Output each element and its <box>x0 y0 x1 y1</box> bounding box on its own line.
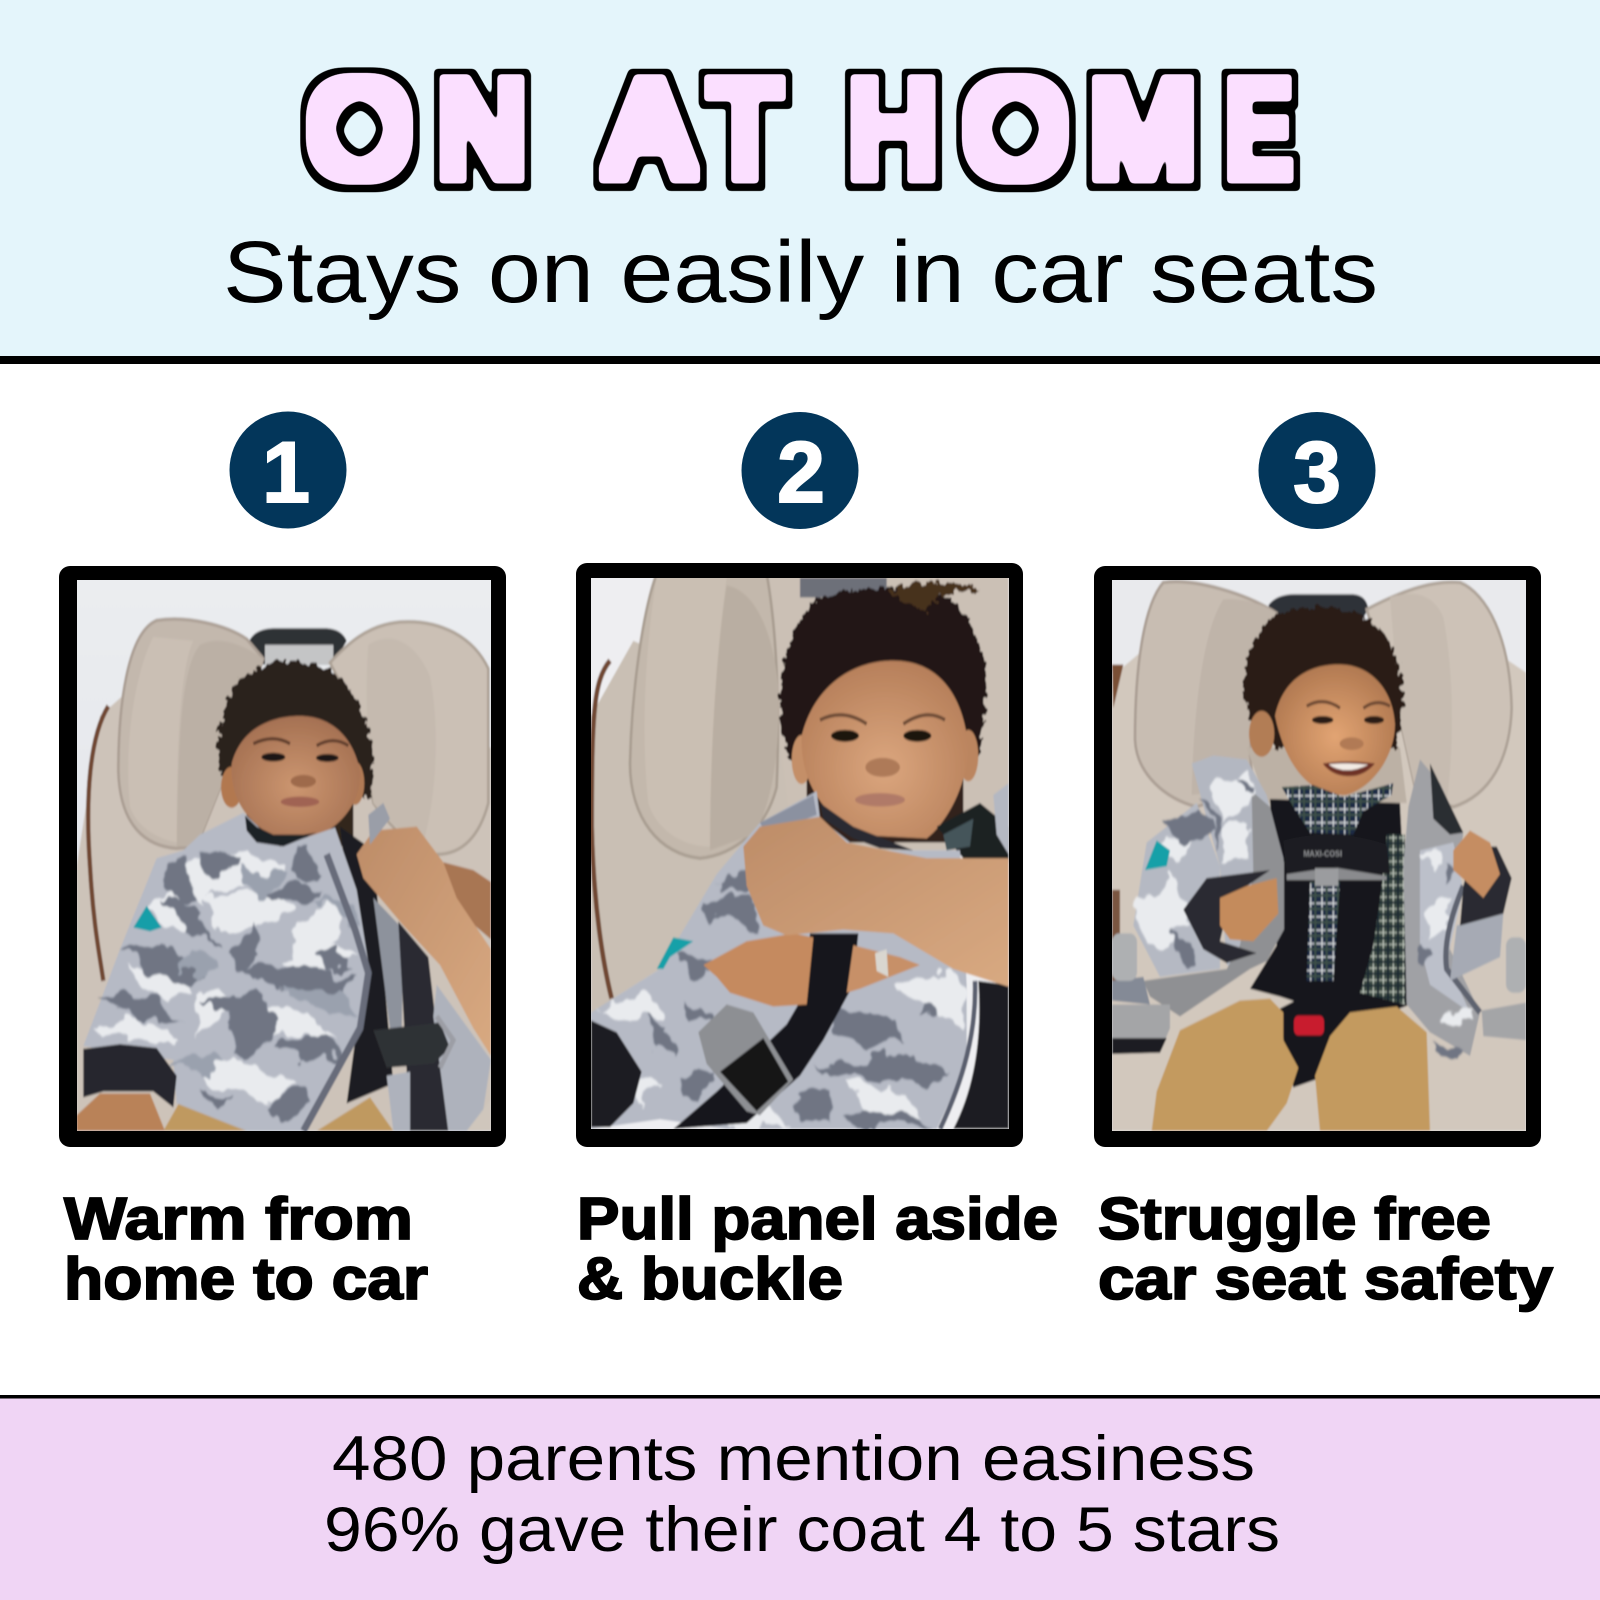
lower hand <box>703 933 813 1007</box>
left fist <box>1220 878 1278 941</box>
subtitle: Stays on easily in car seats <box>223 224 1378 321</box>
face <box>232 716 360 837</box>
panel: photo 2 pulling panel aside to buckle <box>576 563 1023 1147</box>
step badge 3 <box>1258 412 1376 529</box>
camo left <box>1137 767 1250 961</box>
seat body <box>1112 653 1526 1131</box>
straps <box>673 933 858 1129</box>
caption 1: home to car <box>64 1246 428 1312</box>
coat <box>591 791 967 1129</box>
ears <box>221 767 242 808</box>
headrest <box>630 574 778 858</box>
ear <box>1249 711 1274 757</box>
logo <box>657 937 693 969</box>
chest clip <box>698 1005 793 1115</box>
right open panel <box>1403 759 1480 1056</box>
zipper <box>940 981 975 1129</box>
camo patches <box>597 868 967 1129</box>
headrest shadow behind face <box>1247 748 1407 803</box>
step badge 3: 3 <box>1293 425 1341 521</box>
pants <box>164 1103 246 1131</box>
headrest wings <box>118 619 263 848</box>
logo <box>133 906 162 931</box>
clasp <box>1268 594 1368 629</box>
caption 2: & buckle <box>577 1246 843 1312</box>
step badge 1: 1 <box>262 425 310 521</box>
ears <box>792 735 812 784</box>
caption 3: Struggle free <box>1098 1186 1491 1252</box>
seat <box>591 641 793 1016</box>
left open panel <box>1192 756 1283 969</box>
caption 1 <box>64 1186 428 1312</box>
cuff and hand <box>83 1044 177 1107</box>
coat base <box>83 813 369 1131</box>
caption 2 <box>577 1186 1058 1312</box>
title: E <box>1228 55 1289 204</box>
title: O <box>964 55 1067 204</box>
panel: photo 3 smiling child buckled in: MAXI-COSI <box>1303 849 1342 858</box>
title: O <box>308 55 411 204</box>
face <box>1275 664 1395 795</box>
title <box>308 55 1289 204</box>
stat line 2: 96% gave their coat 4 to 5 stars <box>324 1495 1280 1565</box>
camo patches <box>93 844 360 1123</box>
step badge 2: 2 <box>777 425 825 521</box>
neck shadow <box>246 803 354 848</box>
stat line 1: 480 parents mention easiness <box>332 1424 1255 1494</box>
knit collar <box>820 803 913 850</box>
plaid shirt <box>1282 783 1393 835</box>
hair <box>218 660 373 798</box>
bottom left coat <box>1112 977 1150 1005</box>
bracelet <box>875 949 888 977</box>
panel: photo 3 smiling child buckled in <box>1094 566 1541 1147</box>
collar <box>245 816 317 846</box>
hair <box>1243 607 1403 748</box>
side knobs <box>1112 933 1137 981</box>
zipper <box>303 854 368 1131</box>
camo right <box>1420 846 1477 1060</box>
cup holders <box>1112 1005 1170 1054</box>
headrest clasp <box>248 628 347 665</box>
right sleeve and cuff <box>1450 914 1503 981</box>
caption 1: Warm from <box>64 1186 413 1252</box>
panel: footer stats band <box>0 1395 1600 1600</box>
headrests <box>1135 582 1277 807</box>
caption 3: car seat safety <box>1098 1246 1553 1312</box>
step badge 2 <box>742 412 858 529</box>
plaid and strap <box>340 827 393 1103</box>
left sleeve <box>1133 803 1220 977</box>
panel: photo 1 child being zipped into coat <box>59 566 506 1147</box>
cuff <box>591 1020 642 1127</box>
title: M <box>1090 55 1196 204</box>
adult hands <box>443 862 491 939</box>
title: N <box>438 55 526 204</box>
dark collar side <box>937 803 1009 862</box>
title: T <box>710 55 780 204</box>
chest clip <box>1283 834 1390 874</box>
upper arm and hand <box>743 817 1009 987</box>
left cuff <box>1183 870 1270 963</box>
crotch buckle <box>1280 993 1350 1088</box>
caption 3 <box>1098 1186 1553 1312</box>
hair <box>780 582 986 774</box>
neck shadow <box>807 771 963 842</box>
right hand <box>1453 831 1500 898</box>
title: A <box>607 55 693 204</box>
face <box>802 661 968 839</box>
harness body <box>1250 799 1410 1016</box>
seat shell <box>77 692 491 1131</box>
caption 2: Pull panel aside <box>577 1186 1058 1252</box>
smile <box>1323 761 1375 776</box>
pants <box>1152 999 1298 1131</box>
step badge 1 <box>230 412 346 528</box>
panel: header band <box>0 0 1600 364</box>
title: H <box>849 55 937 204</box>
